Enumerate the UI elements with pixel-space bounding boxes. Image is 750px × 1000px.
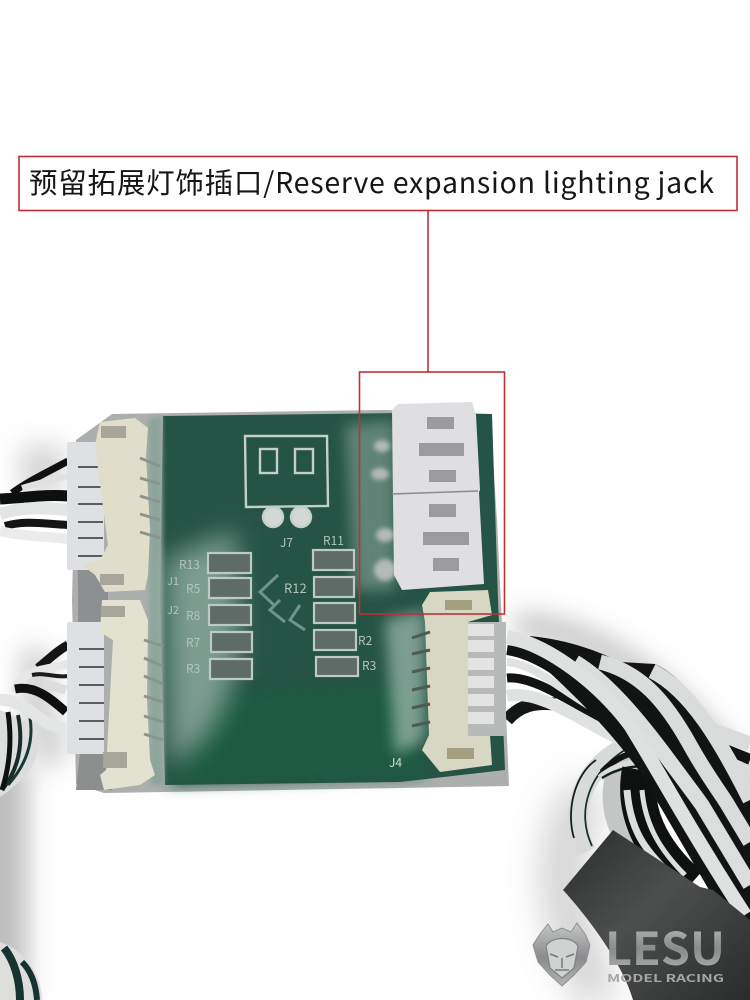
cable shadows [0, 470, 750, 1000]
lower vertical wires [638, 770, 690, 885]
silkscreen labels: R7 [186, 634, 201, 651]
silkscreen labels: R12 [284, 578, 307, 597]
twist strand 2 [575, 662, 750, 885]
callout label box [19, 156, 737, 210]
LESU logo [533, 913, 725, 986]
white jack connectors [392, 402, 484, 590]
pale glare on pcb [165, 530, 240, 765]
callout text: 预留拓展灯饰插口/Reserve expansion lighting jack [29, 161, 714, 202]
twist strand 1 [507, 637, 745, 915]
connector pins [140, 458, 163, 740]
silkscreen labels: J7 [280, 534, 293, 551]
circuit board module [67, 402, 509, 793]
logo tagline: MODEL RACING [607, 971, 724, 986]
lower loop wires [578, 746, 628, 852]
left upper cream connector [82, 418, 150, 592]
right bottom cream connector [412, 590, 506, 772]
green pcb [160, 413, 505, 785]
silkscreen labels: R8 [186, 607, 201, 624]
icon: lion head [533, 923, 590, 986]
twist strand 4 [652, 671, 750, 800]
far right crossing wires [690, 722, 750, 744]
jack-side solder glare [371, 440, 396, 581]
dark backing of main twist [530, 636, 750, 925]
silkscreen labels: R2 [358, 632, 373, 649]
left lower cable bundle [0, 645, 68, 797]
left upper white plug [67, 442, 104, 570]
left solder tabs [78, 565, 108, 625]
silkscreen labels: J4 [389, 754, 402, 771]
translucent glare strip along left connector [148, 416, 164, 785]
left upper cable bundle [0, 461, 68, 539]
silkscreen labels: J2 [167, 602, 179, 618]
callout highlight box around jack [360, 372, 504, 614]
twist strand 3 [600, 662, 750, 842]
logo wordmark: LESU [605, 913, 725, 978]
lower left solder tab [76, 752, 112, 790]
connector metal tabs [100, 426, 127, 768]
silkscreen J7 footprint [245, 436, 328, 527]
lower loop grey backing [603, 745, 660, 880]
left lower white plug [67, 622, 104, 754]
right twisted cable bundle [507, 636, 750, 925]
silkscreen resistors [208, 550, 358, 679]
upper right pcb glare [345, 420, 395, 590]
lesu pcb mark [260, 575, 305, 630]
board base [72, 410, 509, 793]
callout connector line [427, 210, 429, 372]
lower plug wires feeding the twist [507, 703, 555, 720]
darker pcb lower area [168, 685, 425, 785]
bottom left cable fragment [0, 942, 42, 1000]
silkscreen labels: R13 [179, 556, 200, 573]
silkscreen labels [167, 532, 402, 771]
silkscreen labels: R5 [186, 580, 201, 597]
silkscreen labels: J1 [167, 573, 179, 589]
silkscreen labels: R3 [186, 660, 200, 677]
heat shrink tube [563, 830, 750, 1000]
left lower cream connector [100, 600, 155, 790]
silkscreen labels: R11 [323, 532, 344, 549]
silkscreen labels: R3 [362, 657, 376, 674]
lower right pcb glare [385, 610, 425, 755]
